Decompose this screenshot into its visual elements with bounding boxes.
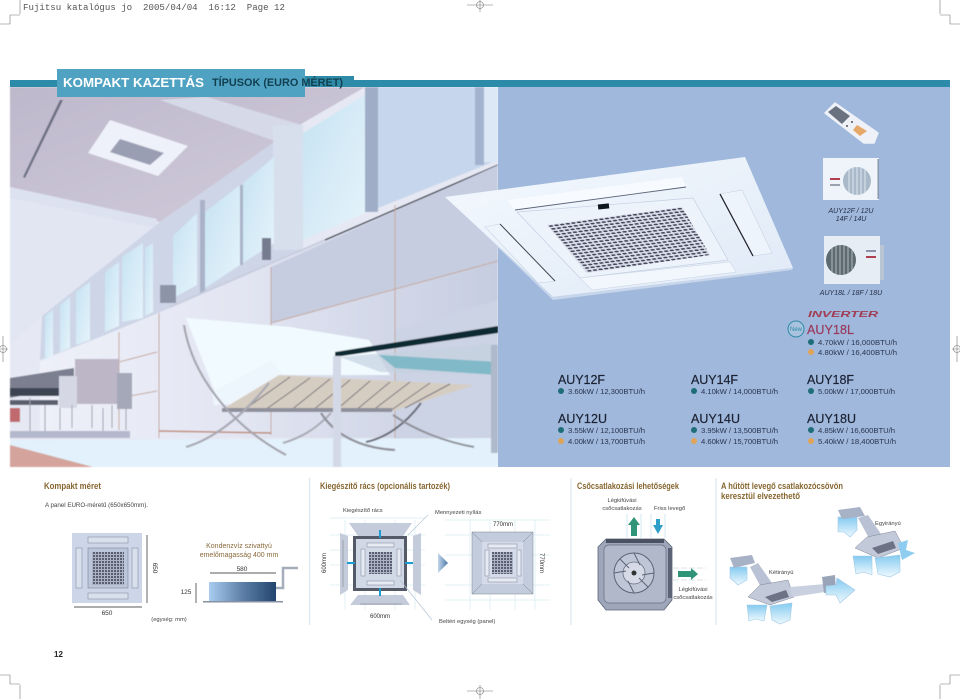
exploded grille: 600mm [322, 553, 328, 573]
model: AUY12F: AUY12F [558, 373, 605, 387]
panel: compact size: (egység: mm) [151, 617, 187, 623]
print header slug: Fujitsu katalógus jo 2005/04/04 16:12 Page 12 [23, 2, 285, 13]
photo: room interior [10, 87, 498, 467]
cassette indoor panel [445, 157, 793, 300]
arrow [438, 553, 448, 573]
unit top view [598, 539, 672, 610]
panel: extra grille: Kiegészítő rács (opcionális tartozék) [320, 481, 450, 491]
right vent [720, 190, 772, 256]
panel dimension drawing [72, 533, 158, 617]
model: AUY18F [807, 373, 895, 396]
panel: compact size [44, 481, 298, 623]
two-way duct illustration [730, 555, 855, 624]
model: AUY18L: 4.80kW / 16,400BTU/h [818, 348, 897, 357]
panel: duct connection options: Friss levegő [654, 506, 685, 512]
upper wall [365, 87, 498, 208]
model: AUY18U: 5.40kW / 18,400BTU/h [818, 437, 896, 446]
model: AUY18U: AUY18U [807, 412, 856, 426]
page number: 12 [54, 650, 63, 659]
model: AUY18L: AUY18L [807, 323, 854, 337]
caption: small unit [827, 208, 874, 223]
panel: compact size: Kompakt méret [44, 481, 101, 491]
left vent [485, 224, 555, 283]
outdoor unit large [824, 236, 884, 284]
model: AUY18F: AUY18F [807, 373, 854, 387]
icon: remote control [825, 103, 878, 143]
caption: small unit: AUY12F / 12U [827, 208, 874, 215]
model: AUY14U: 4.60kW / 15,700BTU/h [701, 437, 778, 446]
panel: ducted cooled air: Kétirányú [769, 570, 794, 576]
model: AUY12U: 4.00kW / 13,700BTU/h [568, 437, 645, 446]
chair [184, 318, 474, 455]
model: AUY18U [807, 412, 896, 446]
panel: duct connection options: Légkifúvási [607, 498, 637, 504]
model: AUY18F: 5.00kW / 17,000BTU/h [818, 387, 895, 396]
panel: ducted cooled air: keresztül elvezethető [721, 491, 801, 501]
panel: extra grille: Beltéri egység (panel) [439, 619, 495, 625]
glass table [333, 326, 498, 467]
caption: large unit: AUY18L / 18F / 18U [819, 290, 883, 297]
assembled grille: 770mm [493, 522, 513, 528]
caption: small unit: 14F / 14U [836, 216, 867, 223]
model: AUY14U: AUY14U [691, 412, 740, 426]
title band [10, 69, 950, 97]
model: AUY14F: AUY14F [691, 373, 738, 387]
new badge: New [790, 327, 803, 333]
drain pump note: emelőmagasság 400 mm [200, 552, 278, 559]
panel: duct connection options [577, 481, 713, 610]
drain pump note: Kondenzvíz szivattyú [206, 543, 272, 550]
title band: KOMPAKT KAZETTÁS [63, 75, 204, 90]
assembled grille: 770mm [538, 553, 544, 573]
new badge [788, 321, 804, 337]
top vent [508, 177, 686, 211]
panel: extra grille: Kiegészítő rács [343, 508, 383, 514]
panel: ducted cooled air [721, 481, 915, 624]
dining set [10, 359, 132, 438]
display [598, 203, 609, 210]
inner panel [517, 198, 728, 278]
panel: duct connection options: Csőcsatlakozási lehetőségek [577, 481, 679, 491]
ceiling cassette in room [88, 120, 188, 176]
side view drawing [181, 566, 298, 603]
panel: ducted cooled air: A hűtött levegő csatlakozócsövön [721, 481, 843, 491]
panel: compact size: A panel EURO-méretű (650x650mm). [45, 502, 148, 509]
panel: duct connection options: csőcsatlakozás [602, 506, 642, 512]
model: AUY18L: 4.70kW / 16,000BTU/h [818, 338, 897, 347]
side view drawing: 580 [237, 566, 248, 573]
panel: extra grille [320, 481, 550, 625]
model: AUY12F: 3.60kW / 12,300BTU/h [568, 387, 645, 396]
inverter logo: INVERTER [808, 310, 878, 319]
model: AUY12U: 3.55kW / 12,100BTU/h [568, 426, 645, 435]
air intake grid [547, 207, 710, 273]
one-way duct illustration [838, 507, 915, 577]
panel dimension drawing: 650 [151, 563, 158, 574]
blue product panel [498, 87, 950, 467]
assembled grille [472, 522, 544, 594]
model: AUY18L [807, 323, 897, 357]
floor [10, 438, 498, 467]
model: AUY12F [558, 373, 645, 396]
drain pump note [200, 543, 278, 559]
exploded grille [322, 523, 421, 620]
side view drawing: 125 [181, 589, 192, 596]
model: AUY14F: 4.10kW / 14,000BTU/h [701, 387, 778, 396]
model: AUY12U: AUY12U [558, 412, 607, 426]
wall [40, 165, 498, 438]
panel: ducted cooled air: Egyirányú [875, 521, 901, 527]
airflow arrows [627, 514, 706, 580]
panel: duct connection options: csőcsatlakozás [673, 595, 713, 601]
panel: extra grille: Mennyezeti nyílás [435, 510, 481, 516]
exploded grille: 600mm [370, 614, 390, 620]
ceiling [10, 87, 365, 222]
panel: duct connection options: Légkifúvási [678, 587, 708, 593]
model: AUY14U: 3.95kW / 13,500BTU/h [701, 426, 778, 435]
model: AUY14U [691, 412, 778, 446]
title band: TÍPUSOK (EURO MÉRET) [212, 76, 343, 89]
model: AUY12U [558, 412, 645, 446]
model: AUY14F [691, 373, 778, 396]
panel dimension drawing: 650 [102, 610, 113, 617]
windows [40, 87, 378, 360]
bottom vent [580, 262, 736, 290]
model: AUY18U: 4.85kW / 16,600BTU/h [818, 426, 895, 435]
outdoor unit small [823, 158, 879, 200]
